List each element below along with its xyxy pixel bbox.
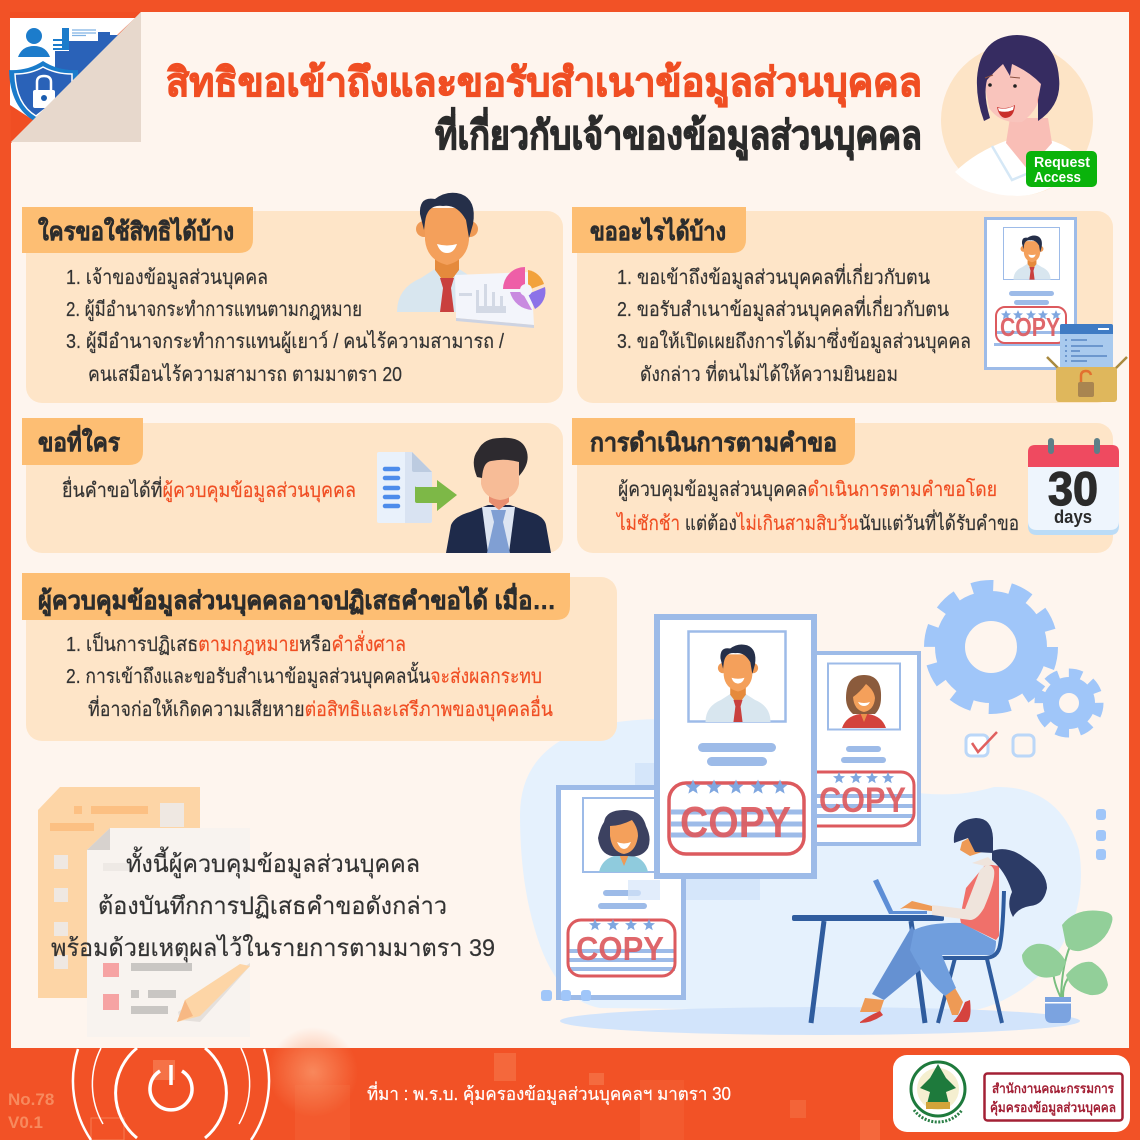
text: processing deadline: ผู้ควบคุมข้อมูลส่วนบุคคลดำเนินการตามคำขอโดย (618, 478, 997, 502)
list: refusal: 1. เป็นการปฏิเสธตามกฎหมายหรือคำสั่งศาล (66, 630, 406, 656)
title: สิทธิขอเข้าถึงและขอรับสำเนาข้อมูลส่วนบุคคล (166, 61, 922, 108)
badge: request access: Request (1034, 154, 1090, 171)
heading: who: ใครขอใช้สิทธิได้บ้าง (38, 216, 234, 246)
text: recording requirement (51, 846, 495, 963)
heading tab: who (22, 207, 253, 253)
footer version text: No.78 (8, 1090, 54, 1109)
illustration: potted plant (1022, 911, 1112, 1023)
card: right copy profile: COPY (819, 781, 906, 820)
icon: calendar 30 days: 30 (1048, 462, 1098, 515)
heading: what: ขออะไรได้บ้าง (590, 216, 726, 246)
card: main copy profile: COPY (680, 798, 791, 847)
text: submit request: ยื่นคำขอได้ที่ผู้ควบคุมข้อมูลส่วนบุคคล (62, 476, 356, 503)
list: who: 2. ผู้มีอำนาจกระทำการแทนตามกฎหมาย (66, 299, 362, 322)
list: refusal: 2. การเข้าถึงและขอรับสำเนาข้อมูลส่วนบุคคลนั้นจะส่งผลกระทบ (66, 662, 542, 689)
text: recording requirement: ต้องบันทึกการปฏิเสธคำขอดังกล่าว (98, 893, 447, 920)
illustration: desk (792, 915, 944, 1023)
list: who: 1. เจ้าของข้อมูลส่วนบุคคล (66, 267, 268, 290)
panel: what can be requested (572, 207, 1127, 403)
illustration: dots right (1096, 809, 1106, 860)
illustration: dots left (541, 990, 591, 1001)
icon: document with arrow (377, 452, 457, 523)
logo: office name box (984, 1074, 1122, 1120)
badge: request access: Access (1034, 169, 1081, 186)
title (166, 61, 922, 161)
list: what: 2. ขอรับสำเนาข้อมูลส่วนบุคคลที่เกี่ยวกับตน (617, 295, 949, 322)
panel: refusal conditions (22, 573, 617, 741)
icon: copy card with unlocked box (986, 218, 1127, 402)
footer version text (8, 1090, 54, 1132)
illustration: chair (938, 891, 1004, 1023)
footer version text: V0.1 (8, 1113, 43, 1132)
heading tab: processing (572, 418, 855, 465)
text: recording requirement: ทั้งนี้ผู้ควบคุมข้อมูลส่วนบุคคล (126, 846, 420, 879)
text: processing deadline: ไม่ชักช้า แต่ต้องไม่เกินสามสิบวันนับแต่วันที่ได้รับคำขอ (615, 509, 1019, 535)
icon: power rings (73, 1048, 269, 1140)
list: what: ดังกล่าว ที่ตนไม่ได้ให้ความยินยอม (640, 360, 898, 386)
heading tab: refusal (22, 573, 570, 620)
icon: calendar 30 days: days (1054, 507, 1092, 527)
illustration: soft rectangle (635, 763, 760, 900)
card: left copy profile (558, 788, 684, 998)
logo: office name box: คุ้มครองข้อมูลส่วนบุคคล (990, 1100, 1116, 1116)
logo: ministry emblem (911, 1062, 965, 1122)
footer decor (91, 1027, 880, 1140)
panel: who can use the right (22, 193, 563, 403)
list: what (617, 263, 971, 386)
illustration: gears (931, 587, 1099, 733)
avatar: woman requesting access (941, 35, 1093, 196)
card: left copy profile: COPY (576, 930, 664, 967)
heading tab: what (572, 207, 746, 253)
illustration: soft rectangle overlay (628, 880, 660, 900)
illustration: blob backdrop (520, 719, 1081, 1012)
heading: processing: การดำเนินการตามคำขอ (590, 429, 837, 457)
panel: where to submit (22, 418, 563, 553)
heading tab: where (22, 418, 143, 465)
list: refusal (66, 630, 553, 722)
icon: data controller (446, 438, 551, 553)
text: processing deadline (615, 478, 1019, 535)
page fold (11, 12, 141, 142)
list: what: 1. ขอเข้าถึงข้อมูลส่วนบุคคลที่เกี่ยวกับตน (617, 263, 930, 290)
list: who: คนเสมือนไร้ความสามารถ ตามมาตรา 20 (88, 363, 402, 386)
corner icon: security shield (9, 12, 141, 143)
illustration: checkboxes (966, 732, 1034, 756)
logo: office name box: สำนักงานคณะกรรมการ (992, 1081, 1114, 1096)
list: who (66, 267, 504, 386)
card: right copy profile (800, 653, 919, 844)
icon: copy card with unlocked box: COPY (1000, 312, 1060, 342)
list: refusal: ที่อาจก่อให้เกิดความเสียหายต่อสิทธิและเสรีภาพของบุคคลอื่น (88, 695, 553, 722)
logo card (893, 1055, 1130, 1132)
illustration: woman working on laptop (860, 818, 1047, 1023)
title: ที่เกี่ยวกับเจ้าของข้อมูลส่วนบุคคล (435, 107, 922, 161)
source text: ที่มา : พ.ร.บ. คุ้มครองข้อมูลส่วนบุคคลฯ มาตรา 30 (367, 1081, 731, 1105)
panel: processing the request (572, 418, 1119, 553)
illustration: note documents (38, 787, 250, 1037)
icon: calendar 30 days (1028, 438, 1119, 535)
text: recording requirement: พร้อมด้วยเหตุผลไว้ในรายการตามมาตรา 39 (51, 934, 495, 963)
illustration: ground shadow (560, 1007, 1080, 1035)
icon: man with chart (397, 193, 545, 328)
heading: where: ขอที่ใคร (38, 425, 121, 457)
heading: refusal: ผู้ควบคุมข้อมูลส่วนบุคคลอาจปฏิเสธคำขอได้ เมื่อ… (38, 583, 556, 617)
badge: request access (1026, 151, 1097, 187)
card: main copy profile (657, 617, 814, 876)
list: what: 3. ขอให้เปิดเผยถึงการได้มาซึ่งข้อมูลส่วนบุคคล (617, 327, 971, 354)
list: who: 3. ผู้มีอำนาจกระทำการแทนผู้เยาว์ / คนไร้ความสามารถ / (66, 330, 504, 354)
